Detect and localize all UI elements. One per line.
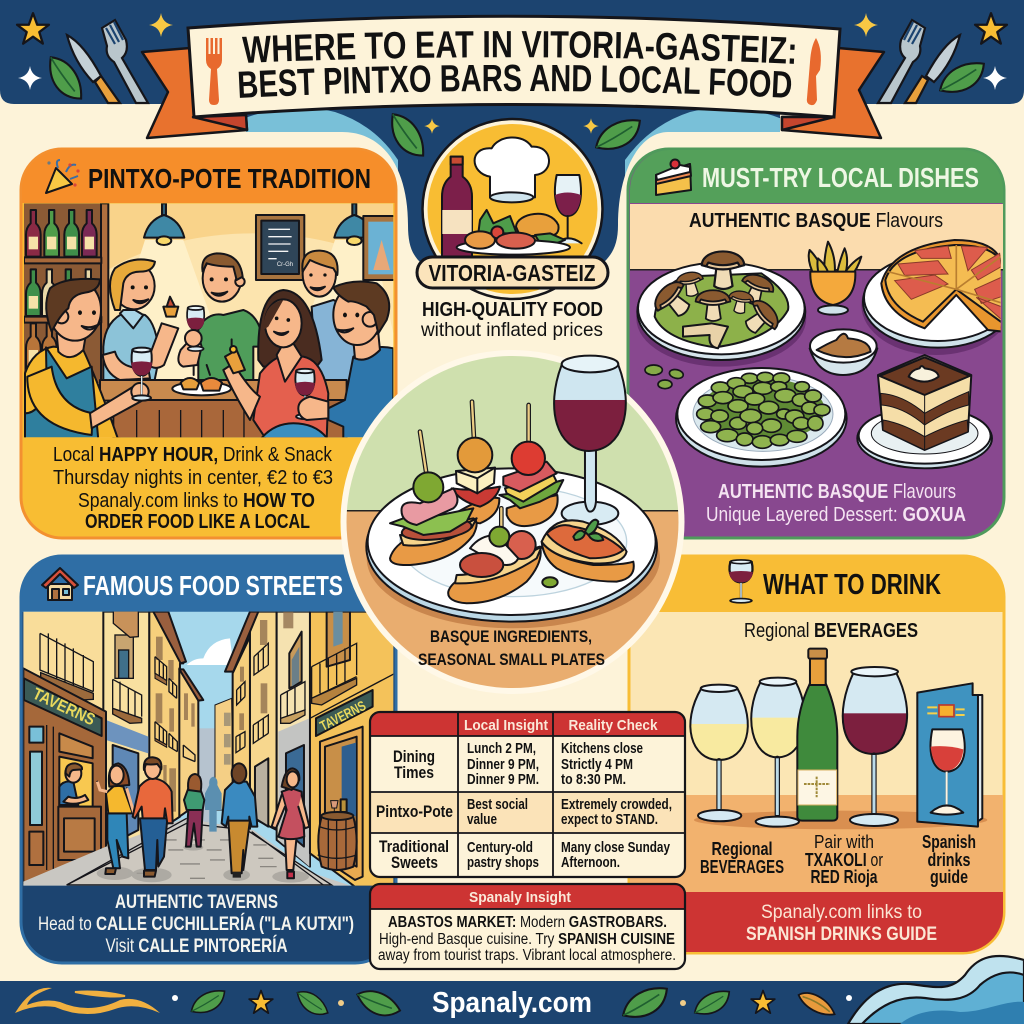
- row: pintxo-pote: Extremely crowded,: [561, 796, 672, 813]
- caption: Local HAPPY HOUR, Drink & Snack: [53, 443, 333, 466]
- row: pintxo-pote: Pintxo-Pote: [376, 802, 453, 821]
- buildings right: [225, 612, 395, 887]
- tagline: without inflated prices: [420, 319, 603, 341]
- footer band: [0, 981, 1024, 1024]
- caption: Visit CALLE PINTORERÍA: [106, 935, 288, 957]
- shelf with bottles: [24, 203, 108, 383]
- dish: loose beans: [645, 365, 684, 389]
- vendor: [59, 781, 78, 805]
- footer decorations: [15, 979, 852, 1024]
- white wine glass left: [687, 685, 751, 821]
- caption: SEASONAL SMALL PLATES: [418, 651, 605, 669]
- caption: AUTHENTIC TAVERNS: [115, 892, 278, 913]
- dish: bean plate: [676, 368, 847, 467]
- plate: [366, 468, 660, 628]
- plate of pintxos: [172, 365, 231, 395]
- illustration: friends at the bar: [24, 203, 394, 438]
- chalkboard: [256, 215, 304, 280]
- title ribbon: [142, 16, 884, 138]
- callout: Spanaly insight: Spanaly Insight: [469, 889, 571, 906]
- brand: Spanaly.com: [432, 987, 592, 1019]
- person: man with apron: [25, 279, 152, 440]
- row: dining times: Dinner 9 PM.: [467, 771, 539, 788]
- chalkboard: Cr-Gh: [277, 262, 293, 268]
- drink labels: drinks: [928, 850, 970, 870]
- table header: Local Insight: [464, 717, 548, 734]
- central pintxo circle: [340, 350, 685, 701]
- walker: woman green: [184, 774, 204, 847]
- panel: Pintxo-Pote tradition: [20, 148, 398, 540]
- buildings right: TAVERNS: [317, 697, 368, 734]
- row: traditional sweets: pastry shops: [467, 854, 539, 871]
- drink labels: [700, 832, 976, 887]
- row: dining times: Lunch 2 PM,: [467, 740, 536, 757]
- title text: WHERE TO EAT IN VITORIA-GASTEIZ:: [242, 31, 795, 64]
- illustration: wines and guide: [687, 649, 987, 829]
- row: traditional sweets: Sweets: [391, 853, 438, 872]
- row: pintxo-pote: value: [467, 811, 497, 828]
- tavern shop left: [23, 668, 106, 883]
- red wine glass: [841, 667, 911, 826]
- caption: Spanaly.com links to HOW TO: [78, 489, 315, 512]
- bottle of txakoli: [797, 649, 837, 821]
- table header: Reality Check: [568, 717, 658, 734]
- icon: house: [42, 568, 78, 600]
- pintxo: cheese and croquette: [452, 402, 500, 523]
- cobbled street: [23, 818, 353, 887]
- icon: cake slice: [656, 160, 691, 195]
- tavern sign right: [316, 690, 373, 736]
- row: pintxo-pote: [376, 796, 672, 828]
- panel: what to drink: [629, 556, 1004, 954]
- icon: small wine glass: [555, 175, 582, 243]
- caption: [53, 443, 333, 533]
- caption: [418, 628, 605, 669]
- row: dining times: [393, 740, 643, 788]
- icon: chef hat: [475, 137, 549, 202]
- dish: sauce bowl: [810, 329, 877, 375]
- pill: Vitoria-Gasteiz: VITORIA-GASTEIZ: [428, 260, 596, 286]
- far silhouette: [205, 777, 222, 832]
- pintxo: tomato and basil: [542, 520, 634, 582]
- caption: ORDER FOOD LIKE A LOCAL: [85, 510, 310, 533]
- dish: tortilla plate: [863, 240, 1013, 348]
- title text: [238, 31, 795, 98]
- center decor: [391, 112, 640, 158]
- pintxo: tomato stack: [499, 405, 563, 526]
- panel: must-try local dishes: [628, 149, 1013, 538]
- illustration: street scene: [23, 610, 395, 887]
- row: dining times: Dinner 9 PM,: [467, 756, 539, 773]
- drink labels: guide: [930, 867, 968, 887]
- row: traditional sweets: [379, 837, 671, 872]
- pintxo in hand: [163, 307, 178, 317]
- red callout text: SPANISH DRINKS GUIDE: [746, 924, 937, 945]
- icon: party popper: [46, 160, 80, 193]
- person: woman in red: [223, 290, 328, 440]
- balconies left: [40, 610, 195, 762]
- person: man in blue: [295, 282, 393, 440]
- walking couple: [97, 757, 173, 877]
- tagline: [420, 299, 603, 341]
- wave: [848, 956, 1024, 1024]
- subheading: Regional BEVERAGES: [744, 620, 918, 642]
- person: man in green: [178, 253, 263, 387]
- person: man at back: [302, 251, 357, 387]
- caption: BASQUE INGREDIENTS,: [430, 628, 592, 646]
- heading: WHAT TO DRINK: [763, 569, 941, 601]
- tavern shop left: TAVERNS: [30, 684, 98, 729]
- red callout text: Spanaly.com links to: [761, 902, 922, 923]
- barrel: [318, 799, 357, 870]
- drink labels: Regional: [712, 839, 772, 859]
- far buildings: [198, 698, 233, 828]
- callout: Spanaly insight: [370, 884, 685, 969]
- drink labels: RED Rioja: [810, 867, 878, 887]
- row: traditional sweets: Afternoon.: [561, 854, 620, 871]
- red callout text: [746, 902, 937, 945]
- plate with food: [457, 210, 570, 255]
- row: pintxo-pote: Best social: [467, 796, 528, 813]
- icon: wine glass: [729, 560, 753, 603]
- dish: piparra peppers: [809, 242, 861, 315]
- person: blonde woman: [103, 259, 178, 387]
- medallion: Vitoria-Gasteiz: [422, 119, 602, 299]
- balconies right: [236, 643, 357, 753]
- row: traditional sweets: Many close Sunday: [561, 839, 671, 856]
- panel header: [21, 149, 396, 203]
- callout: Spanaly insight: High-end Basque cuisine. Try SPANISH CUISINE: [379, 931, 675, 948]
- subheading: AUTHENTIC BASQUE Flavours: [689, 210, 943, 232]
- caption: Thursday nights in center, €2 to €3: [53, 466, 333, 489]
- row: dining times: Kitchens close: [561, 740, 643, 757]
- cloud: [187, 638, 233, 665]
- icon: banner knife: [807, 38, 821, 105]
- buildings left: [23, 610, 203, 885]
- icon: banner fork: [206, 38, 222, 105]
- pintxo: ham and olive: [390, 432, 477, 565]
- illustration: dishes: [636, 240, 1013, 468]
- row: dining times: Times: [394, 763, 434, 782]
- panel: famous food streets: [21, 556, 396, 963]
- drink labels: Spanish: [922, 832, 976, 852]
- row: dining times: Strictly 4 PM: [561, 756, 633, 773]
- caption: Head to CALLE CUCHILLERÍA ("LA KUTXI"): [38, 913, 354, 935]
- wine glass: [553, 356, 628, 525]
- header icons right: [854, 13, 1007, 103]
- row: pintxo-pote: expect to STAND.: [561, 811, 658, 828]
- row: traditional sweets: Traditional: [379, 837, 449, 856]
- header band: [0, 0, 1024, 720]
- mushroom salad plate: [637, 251, 805, 360]
- heading: FAMOUS FOOD STREETS: [83, 570, 343, 601]
- lamps: [144, 203, 375, 245]
- caption: AUTHENTIC BASQUE Flavours: [718, 481, 956, 503]
- row: traditional sweets: Century-old: [467, 839, 533, 856]
- table: local insight vs reality check: [370, 712, 685, 877]
- wine guide booklet: [917, 683, 982, 827]
- framed picture: [363, 216, 395, 280]
- pintxo: chorizo and cheese: [448, 508, 542, 603]
- walker: man from behind: [222, 763, 257, 878]
- icon: wine bottle: [442, 157, 472, 257]
- title text: BEST PINTXO BARS AND LOCAL FOOD: [238, 64, 792, 98]
- white wine glass middle: [747, 678, 811, 827]
- dish: goxua dessert: [857, 355, 992, 468]
- bar counter: [100, 380, 347, 438]
- caption: [706, 481, 966, 526]
- heading: PINTXO-POTE TRADITION: [88, 163, 371, 194]
- drink labels: BEVERAGES: [700, 857, 784, 877]
- drink labels: TXAKOLI or: [805, 850, 883, 870]
- drink labels: Pair with: [814, 832, 874, 852]
- title banner: [188, 16, 840, 117]
- header icons left: [17, 13, 173, 103]
- walker: woman in pink dress: [272, 768, 309, 878]
- doorway: [320, 727, 363, 880]
- row: dining times: Dining: [393, 747, 435, 766]
- row: dining times: to 8:30 PM.: [561, 771, 626, 788]
- callout: Spanaly insight: ABASTOS MARKET: Modern GASTROBARS.: [388, 914, 667, 931]
- callout: Spanaly insight: away from tourist traps. Vibrant local atmosphere.: [378, 947, 676, 964]
- table header: [464, 717, 658, 734]
- caption: Unique Layered Dessert: GOXUA: [706, 504, 966, 526]
- olive: [542, 577, 558, 587]
- caption: [38, 892, 354, 957]
- tagline: HIGH-QUALITY FOOD: [422, 299, 603, 321]
